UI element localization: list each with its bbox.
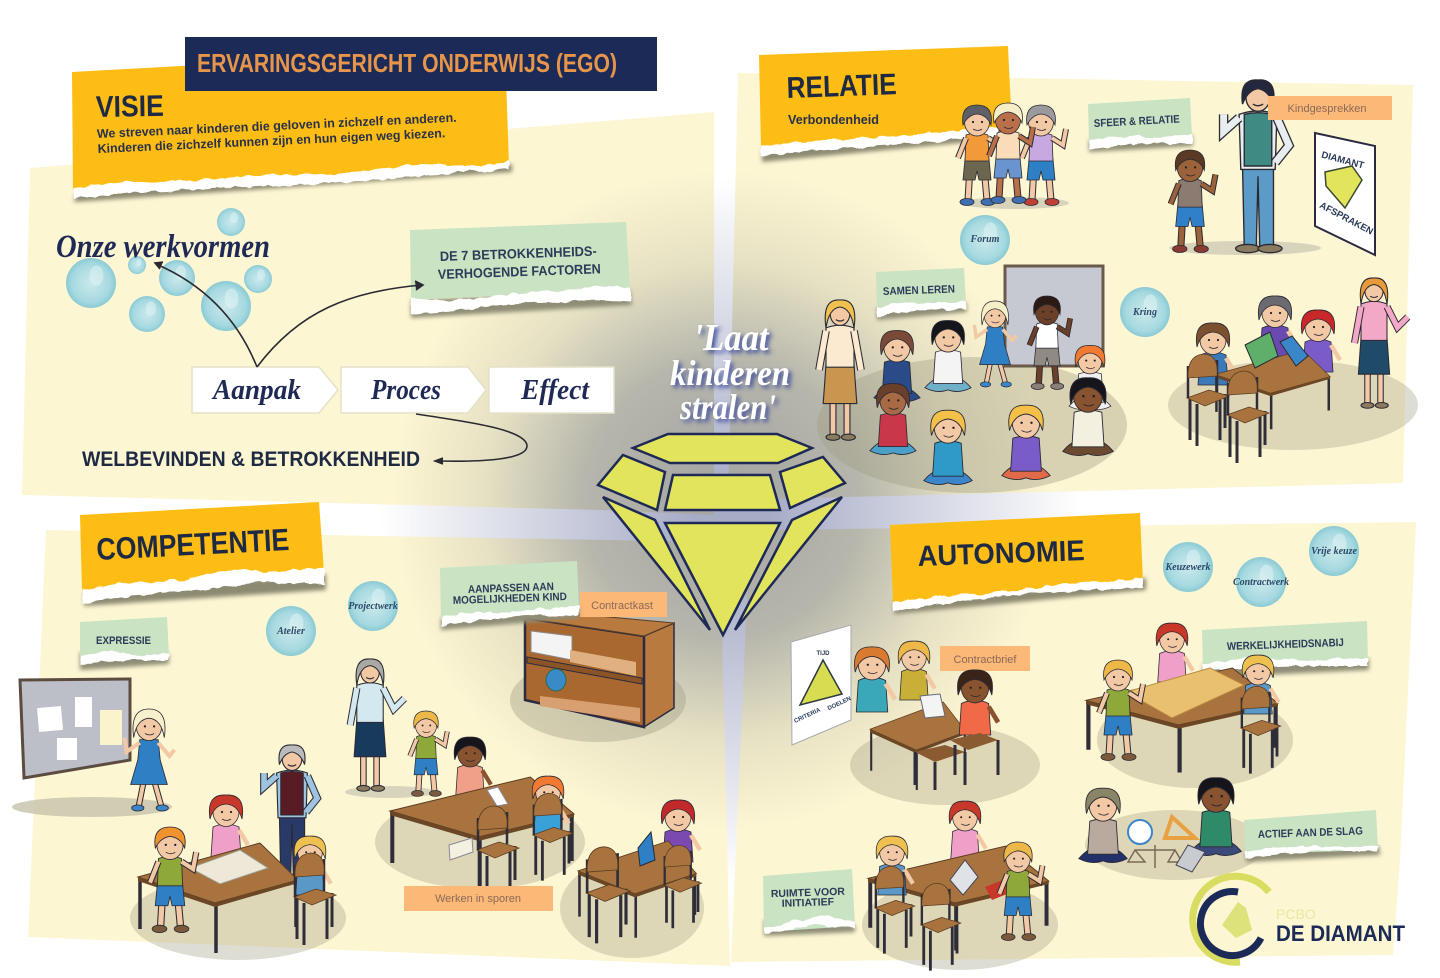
panel: competentie background	[28, 530, 730, 966]
label: kindgesprekken	[1268, 96, 1392, 120]
panel: autonomie heading: AUTONOMIE	[917, 535, 1085, 573]
whiteboard	[1005, 266, 1103, 366]
scene: three friends	[958, 103, 1069, 209]
label: contractbrief	[940, 646, 1030, 671]
vision sentence: We streven naar kinderen die geloven in zichzelf en anderen.	[97, 111, 457, 141]
note: 7 betrokkenheidsverhogende factoren	[410, 222, 632, 318]
arrow: proces to welbevinden	[416, 414, 527, 464]
bubble: projectwerk: Projectwerk	[348, 601, 398, 612]
bubble: forum	[960, 215, 1010, 265]
arrow: aanpak to werkvormen	[155, 262, 257, 367]
title banner	[185, 37, 657, 91]
bubble: keuzewerk	[1163, 542, 1213, 592]
bubble: contractwerk	[1233, 557, 1289, 607]
slogan: kinderen	[670, 353, 790, 393]
panel: autonomie background	[731, 522, 1416, 962]
note: sfeer en relatie	[1088, 98, 1193, 152]
scene: working table	[375, 737, 585, 898]
teacher	[819, 300, 861, 440]
bubble: vrije keuze: Vrije keuze	[1311, 546, 1357, 557]
label: werken in sporen: Werken in sporen	[435, 893, 521, 905]
chevron: effect: Effect	[520, 375, 590, 406]
slogan: stralen'	[679, 387, 776, 427]
arrow: aanpak to factoren	[257, 281, 423, 367]
bubble: atelier: Atelier	[276, 626, 305, 637]
bubble: vrije keuze	[1309, 526, 1359, 576]
bubble: contractwerk: Contractwerk	[1233, 577, 1289, 588]
scene: map table with teacher	[130, 745, 346, 960]
note: aanpassen aan mogelijkheden kind: AANPASSEN AAN	[468, 581, 554, 596]
scene: teacher with child	[345, 659, 447, 798]
bubble: forum: Forum	[970, 234, 1000, 245]
chevron: proces	[341, 367, 486, 413]
note: ruimte voor initiatief: INITIATIEF	[782, 896, 835, 910]
note: aanpassen aan mogelijkheden kind	[440, 561, 579, 630]
bubble: atelier	[266, 606, 316, 656]
note: ruimte voor initiatief: RUIMTE VOOR	[771, 886, 846, 900]
logo: de diamant: PCBO	[1276, 906, 1316, 922]
bubbles: werkvormen	[66, 208, 272, 332]
note: ruimte voor initiatief	[763, 869, 855, 936]
scene: circle time	[817, 266, 1127, 493]
diamond	[598, 434, 845, 635]
note: 7 betrokkenheidsverhogende factoren: DE 7 BETROKKENHEIDS-	[440, 244, 597, 264]
heading text: VISIE	[96, 90, 164, 124]
scene: group at table	[1168, 278, 1418, 463]
panel: competentie heading	[80, 502, 326, 606]
poster: triangle: DOELEN	[827, 696, 852, 712]
bubble: kring: Kring	[1132, 307, 1157, 318]
note: werkelijkheidsnabij: WERKELIJKHEIDSNABIJ	[1227, 637, 1344, 653]
bubble: kring	[1120, 287, 1170, 337]
scene: teacher and child talking	[1169, 80, 1321, 255]
label: contractbrief: Contractbrief	[954, 654, 1017, 666]
logo: de diamant	[1193, 876, 1406, 962]
note: actief aan de slag: ACTIEF AAN DE SLAG	[1258, 825, 1363, 841]
process chevrons	[192, 367, 614, 413]
scene: sand table	[1086, 623, 1293, 788]
scene: laptop table	[560, 800, 704, 958]
scene: laptop group table	[862, 801, 1058, 971]
vision sentence	[97, 111, 458, 156]
panel: visie background	[22, 112, 714, 515]
note: samen leren: SAMEN LEREN	[883, 283, 955, 298]
chevron: aanpak	[192, 367, 338, 413]
poster: diamant afspraken	[1315, 133, 1375, 255]
chevron: proces: Proces	[370, 375, 441, 406]
scene: contract table	[850, 641, 1040, 805]
poster: triangle: TIJD	[816, 651, 830, 657]
vision sentence: Kinderen die zichzelf kunnen zijn en hun eigen weg kiezen.	[97, 126, 446, 156]
poster: diamant afspraken: AFSPRAKEN	[1317, 200, 1375, 238]
note: expressie	[80, 617, 169, 670]
label: contractkast: Contractkast	[591, 600, 653, 612]
heading: onze werkvormen: Onze werkvormen	[56, 229, 270, 265]
torn white edge	[73, 161, 510, 198]
note: expressie: EXPRESSIE	[96, 635, 151, 647]
label: kindgesprekken: Kindgesprekken	[1288, 103, 1366, 115]
poster: triangle: CRITERIA	[793, 707, 822, 725]
panel: relatie background	[728, 73, 1413, 500]
note: samen leren	[876, 268, 967, 320]
note: 7 betrokkenheidsverhogende factoren: VERHOGENDE FACTOREN	[438, 261, 601, 282]
text: welbevinden en betrokkenheid: WELBEVINDEN & BETROKKENHEID	[82, 448, 420, 471]
poster: diamant afspraken: DIAMANT	[1320, 150, 1365, 172]
panel: visie heading	[72, 48, 512, 202]
panel: relatie heading: Verbondenheid	[788, 112, 879, 127]
title banner: ERVARINGSGERICHT ONDERWIJS (EGO)	[197, 48, 617, 78]
poster: triangle	[791, 625, 852, 745]
note: sfeer en relatie: SFEER & RELATIE	[1094, 114, 1180, 130]
note: werkelijkheidsnabij	[1202, 621, 1369, 678]
logo: de diamant: DE DIAMANT	[1276, 921, 1406, 946]
panel: autonomie heading	[890, 513, 1146, 614]
scene: floor with tools	[1079, 778, 1265, 880]
note: aanpassen aan mogelijkheden kind: MOGELIJKHEDEN KIND	[453, 591, 567, 607]
label: contractkast	[580, 592, 667, 617]
bubble: keuzewerk: Keuzewerk	[1164, 562, 1210, 573]
slogan	[670, 317, 790, 427]
panel: relatie heading: RELATIE	[786, 68, 897, 105]
bubble: projectwerk	[348, 581, 398, 631]
chevron: aanpak: Aanpak	[211, 374, 301, 406]
scene: pin board with child	[12, 679, 174, 817]
panel: relatie heading	[759, 46, 1012, 162]
background cross	[380, 180, 1080, 880]
panel: competentie heading: COMPETENTIE	[96, 522, 290, 567]
note: actief aan de slag	[1244, 810, 1380, 862]
slogan: 'Laat	[694, 317, 770, 359]
chevron: effect	[489, 367, 614, 413]
scene: cabinet	[510, 612, 686, 742]
label: werken in sporen	[404, 886, 553, 911]
